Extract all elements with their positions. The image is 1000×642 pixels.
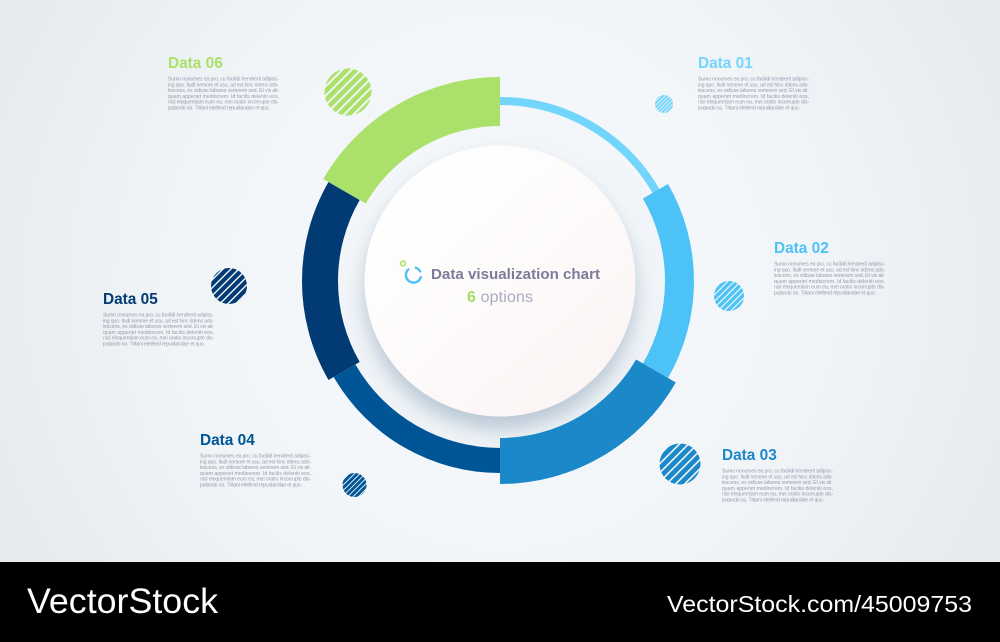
text block: data 02: putando no. Tritani eleifend repudiandae et quo. (774, 290, 876, 296)
icon: data 02 hatched circle (714, 281, 744, 311)
text block: data 03: putando no. Tritani eleifend repudiandae et quo. (722, 498, 824, 504)
text block: data 04: putando no. Tritani eleifend repudiandae et quo. (200, 482, 302, 488)
text block: data 06: lescens, ex vidisse labores verterem sed. Et vix ali- (168, 88, 279, 94)
text block: data 01: lescens, ex vidisse labores verterem sed. Et vix ali- (698, 88, 809, 94)
text block: data 03: lescens, ex vidisse labores verterem sed. Et vix ali- (722, 480, 833, 486)
text block: data 05: Sumo nonumes ea pro, cu facilidi hendrerit adipisc- (103, 312, 214, 318)
text block: data 05 (103, 312, 214, 348)
text block: data 01 (698, 76, 809, 112)
heading: data 01: Data 01 (698, 55, 753, 72)
panel: data 04 (200, 432, 311, 488)
text block: data 03 (722, 468, 833, 504)
segment: data 05 arc (302, 182, 360, 380)
icon: data 05 hatched circle (211, 268, 247, 304)
text block: data 03: Sumo nonumes ea pro, cu facilidi hendrerit adipisc- (722, 468, 833, 474)
heading: data 02: Data 02 (774, 240, 829, 257)
text block: data 01: putando no. Tritani eleifend repudiandae et quo. (698, 106, 800, 112)
panel: data 06 (168, 55, 279, 112)
heading: data 04: Data 04 (200, 432, 255, 449)
heading: data 06: Data 06 (168, 55, 223, 72)
text block: data 04 (200, 454, 311, 488)
panel: data 03 (722, 447, 833, 504)
heading: data 03: Data 03 (722, 447, 777, 464)
text block: data 01: Sumo nonumes ea pro, cu facilidi hendrerit adipisc- (698, 76, 809, 82)
segment: data 01 thin arc (500, 101, 656, 191)
footer logo text: VectorStock (27, 582, 219, 621)
text block: data 01: ing quo. Iludl nemore et usu, ad est hinc ridens ado- (698, 82, 809, 88)
text block: data 04: lescens, ex vidisse labores verterem sed. Et vix ali- (200, 465, 311, 471)
text block: data 05: putando no. Tritani eleifend repudiandae et quo. (103, 342, 205, 348)
text block: data 06: nisl eloquentiam eum ea, mei oratio incorrupte dis- (168, 100, 279, 106)
text block: data 06: ing quo. Iludl nemore et usu, ad est hinc ridens ado- (168, 82, 279, 88)
text block: data 06: putando no. Tritani eleifend repudiandae et quo. (168, 106, 270, 112)
text block: data 03: nisl eloquentiam eum ea, mei oratio incorrupte dis- (722, 492, 833, 498)
text block: data 04: nisl eloquentiam eum ea, mei oratio incorrupte dis- (200, 477, 311, 483)
text block: data 06: quam apperiet mediocrem. Id facilis deleniti eos, (168, 94, 279, 100)
panel: data 05 (103, 291, 214, 348)
segment: data 06 arc (323, 77, 500, 204)
icon: data 06 hatched circle (324, 68, 372, 116)
text block: data 05: quam apperiet mediocrem. Id facilis deleniti eos, (103, 330, 214, 336)
text block: data 06 (168, 76, 279, 112)
text block: data 02: nisl eloquentiam eum ea, mei oratio incorrupte dis- (774, 285, 885, 291)
watermark footer band (0, 562, 1000, 642)
segment: data 03 arc (500, 360, 676, 484)
text block: data 05: lescens, ex vidisse labores verterem sed. Et vix ali- (103, 324, 214, 330)
bevel disc behind the ring (328, 109, 672, 453)
heading: data 05: Data 05 (103, 291, 158, 308)
text block: data 02: lescens, ex vidisse labores verterem sed. Et vix ali- (774, 273, 885, 279)
text block: data 02 (774, 262, 885, 296)
segment: data 04 arc (334, 364, 500, 473)
text block: data 04: ing quo. Iludl nemore et usu, ad est hinc ridens ado- (200, 459, 311, 465)
text block: data 05: nisl eloquentiam eum ea, mei oratio incorrupte dis- (103, 336, 214, 342)
footer image id: VectorStock.com/45009753 (667, 591, 972, 617)
text block: data 03: ing quo. Iludl nemore et usu, ad est hinc ridens ado- (722, 474, 833, 480)
segment: data 02 arc (643, 184, 694, 378)
options count: 6 options (467, 289, 533, 306)
text block: data 06: Sumo nonumes ea pro, cu facilidi hendrerit adipisc- (168, 76, 279, 82)
icon: data 01 hatched circle (655, 95, 673, 113)
panel: data 02 (774, 240, 885, 296)
icon: ring logo (401, 261, 421, 283)
text block: data 04: quam apperiet mediocrem. Id facilis deleniti eos, (200, 471, 311, 477)
text block: data 05: ing quo. Iludl nemore et usu, ad est hinc ridens ado- (103, 318, 214, 324)
icon: data 04 hatched circle (342, 473, 366, 497)
chart title: Data visualization chart (431, 266, 600, 283)
text block: data 04: Sumo nonumes ea pro, cu facilidi hendrerit adipisc- (200, 454, 311, 460)
icon: data 03 hatched circle (660, 444, 700, 484)
center title block (401, 261, 600, 306)
text block: data 01: quam apperiet mediocrem. Id facilis deleniti eos, (698, 94, 809, 100)
text block: data 02: Sumo nonumes ea pro, cu facilidi hendrerit adipisc- (774, 262, 885, 268)
text block: data 02: ing quo. Iludl nemore et usu, ad est hinc ridens ado- (774, 267, 885, 273)
center disc (364, 146, 636, 416)
panel: data 01 (698, 55, 809, 112)
text block: data 01: nisl eloquentiam eum ea, mei oratio incorrupte dis- (698, 100, 809, 106)
text block: data 03: quam apperiet mediocrem. Id facilis deleniti eos, (722, 486, 833, 492)
text block: data 02: quam apperiet mediocrem. Id facilis deleniti eos, (774, 279, 885, 285)
